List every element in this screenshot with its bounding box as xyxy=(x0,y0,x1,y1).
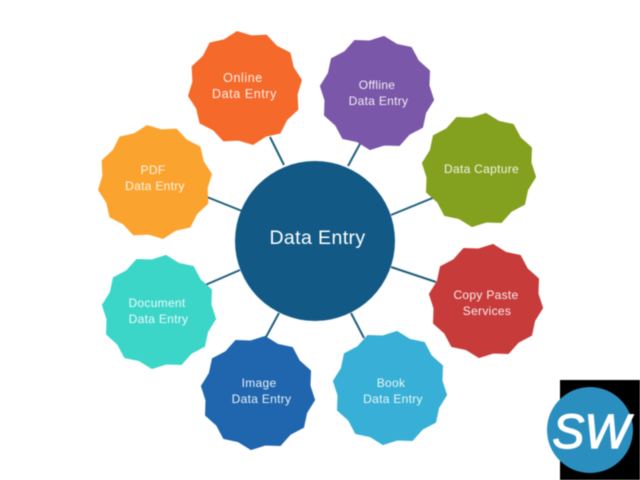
node: Image Data Entry xyxy=(194,329,322,457)
node: Copy Paste Services: Services xyxy=(463,304,511,318)
badge: SW logo xyxy=(547,380,640,480)
node: Book Data Entry: Book xyxy=(377,376,406,390)
node: Document Data Entry xyxy=(95,248,223,376)
node: Offline Data Entry xyxy=(313,29,441,157)
node: Image Data Entry: Image xyxy=(242,376,276,390)
node: PDF Data Entry: Data Entry xyxy=(125,179,185,193)
node: Book Data Entry xyxy=(326,324,454,452)
node: Data Capture xyxy=(415,106,543,234)
node: PDF Data Entry: PDF xyxy=(141,163,165,177)
central hub: Data Entry: Data Entry xyxy=(269,227,366,249)
node: Document Data Entry: Document xyxy=(128,296,186,310)
node: Document Data Entry: Data Entry xyxy=(129,312,188,326)
node: Online Data Entry: Online xyxy=(223,71,263,85)
badge: SW logo: SW xyxy=(552,406,634,459)
node: PDF Data Entry xyxy=(91,118,219,246)
central hub: Data Entry xyxy=(235,161,395,321)
node: Online Data Entry xyxy=(181,24,309,152)
node: Online Data Entry: Data Entry xyxy=(212,87,277,101)
node: Offline Data Entry: Offline xyxy=(359,78,395,92)
node: Book Data Entry: Data Entry xyxy=(363,392,423,406)
node: Data Capture: Data Capture xyxy=(444,162,519,176)
connector lines xyxy=(203,137,436,338)
node: Copy Paste Services xyxy=(422,237,550,365)
node: Copy Paste Services: Copy Paste xyxy=(453,288,519,302)
node: Image Data Entry: Data Entry xyxy=(232,392,291,406)
node: Offline Data Entry: Data Entry xyxy=(349,94,408,108)
